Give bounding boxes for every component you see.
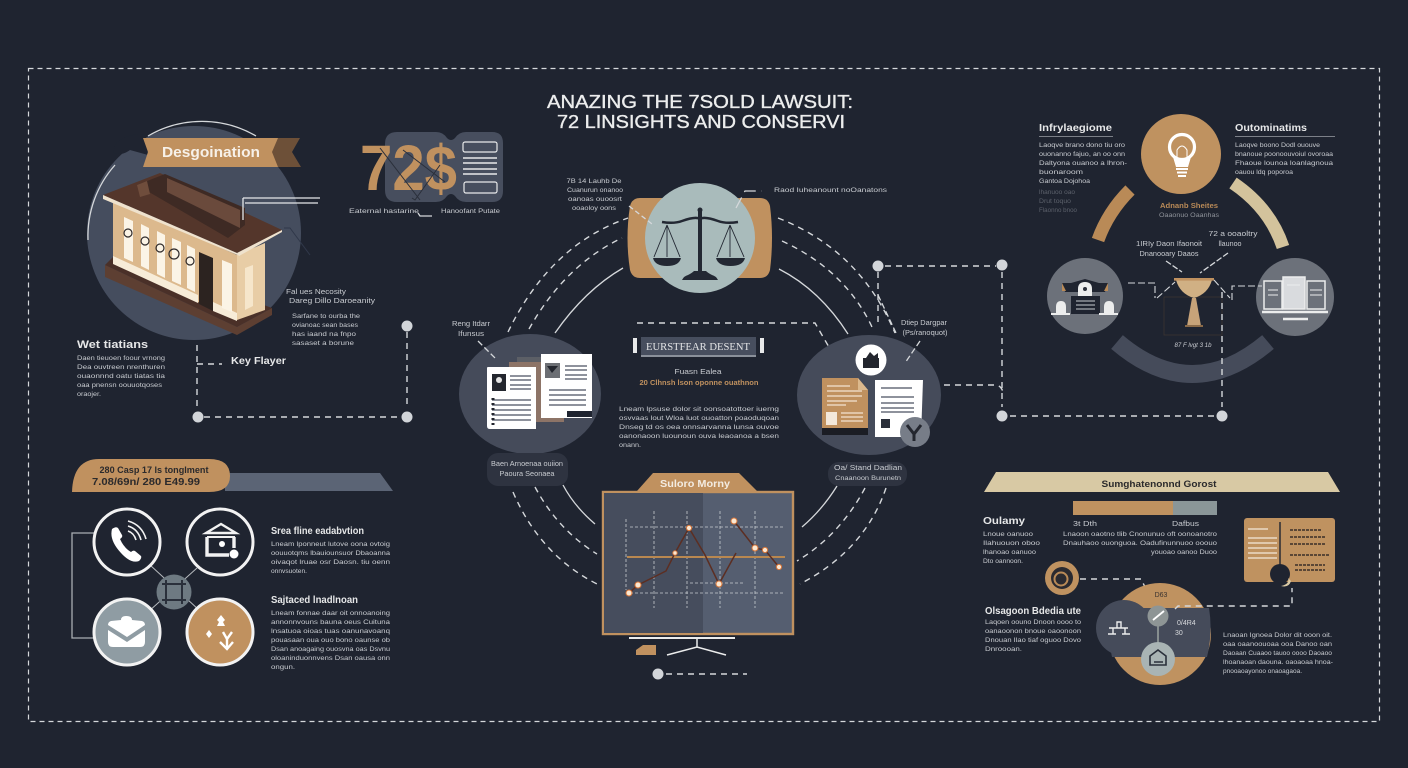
text block: Wet tiatians: ouaonnnd oatu tiatas tia [77,373,165,380]
chart: circular diagram [1096,583,1292,685]
title: ANAZING THE 7SOLD LAWSUIT: [547,92,853,112]
text block: Sajtacoed lnaslnoan: lnsatuoa oioas tuas oanunavoanq [271,628,390,635]
text block: Falue necessary: sasaset a borune [292,340,354,347]
text: Olsagoon: Laqoen oouno Dnoon oooo to [985,619,1081,626]
banner: Desgoination: Desgoination [162,145,260,161]
panel: building illustration [87,121,320,340]
connector: bottom dot [652,668,747,680]
text: Outominatims: Laoqve boono Dodl ououve [1235,142,1320,149]
text: Lorem: pnooaoayonoo onaoagaoa. [1223,668,1302,675]
text: center captions: 1IRIy Daon Ifaonoit [1136,239,1202,248]
icon: tan document [822,378,868,435]
central orbit arcs [508,218,895,584]
text block: Wet tiatians: Daen tieuoen foour vrnong [77,355,165,362]
connectors: right flow [872,260,1228,422]
title [547,92,853,132]
icon: hub [156,574,192,610]
label pill: Paoura Seonaea [500,469,555,478]
heading: Eurtfear Desent: EURSTFEAR DESENT [646,341,750,353]
text: Lorem: lhoanaoan daouna. oaoaoaa hnoa- [1223,659,1333,666]
text: center captions: Dnanooary Daaos [1140,249,1199,258]
panel: bottom-left header: 7.08/69n/ 280 E49.99 [92,476,200,488]
text block: Falue necessary: has iaand na fnpo [292,331,356,338]
text block: Secure foundation: Srea fline eadabvtion [271,525,364,537]
text: Oulamy [983,515,1040,565]
left stage icon [1047,258,1123,334]
panel: central text: onann. [619,442,641,449]
panel: icon network [72,509,253,665]
text: Infrylaegiome: Gantoa Dojohoa [1039,178,1090,185]
text: Infrylaegiome: buonaroom [1039,169,1084,176]
panel: right documents [797,320,948,486]
text: Olsagoon: Olsagoon Bdedia ute [985,605,1081,617]
panel: bottom-left header [72,459,393,492]
text: Infrylaegiome: Drut toquo [1039,198,1071,205]
panel: central text [619,323,833,449]
panel: left documents [452,321,601,486]
panel: 72$ stat [349,132,503,216]
text block: Wet tiatians: oraojer. [77,391,101,398]
text block: top left scale note: oanoas ouoosrt [568,196,622,203]
panel: right documents: Dtiep Dargpar [901,320,948,327]
connector: key player [192,320,412,422]
label pill: Cnaanoon Burunetn [835,475,901,482]
text: Lorem [1223,632,1333,675]
panel: central text: Fuasn Ealea [674,367,723,376]
panel: Infrastructure cycle (top right): 87 F lvgt 3 1b [1174,342,1212,349]
text block: Secure foundation: onnvsuoten. [271,568,307,575]
icon: small gauge [1045,561,1155,607]
panel: left documents: Reng Itdarr [452,321,491,328]
text: Outominatims: Fhaoue lounoa loanlagnoua [1235,160,1333,167]
text block: Sajtacoed lnaslnoan: annonnvouns bauna oeus Cuituna [271,619,390,626]
text block: Falue necessary: Fal ues Necosity [286,287,346,296]
text block: Falue necessary [286,287,375,347]
text: Oulamy: Oulamy [983,515,1025,527]
text block: top right scale note: Raod Iuheanount noOanatons [774,187,888,194]
panel: Summary card (bottom right): Dafbus [1172,519,1199,528]
panel: 72$ stat: Hanoofant Putate [441,208,500,215]
right stage icon [1256,258,1334,336]
text: Infrylaegiome: Infrylaegiome [1039,122,1112,134]
text: Olsagoon: Dnouan Ilao tiaf oguoo Dovo [985,637,1081,644]
text block: top left scale note: 7B 14 Lauhb De [566,178,622,185]
icon: document stack [487,354,592,429]
panel: bottom-left header: 280 Casp 17 ls tonglment [100,465,208,475]
icon: gear badge [900,417,930,447]
text: Lorem: Daoaan Cuaaoo tauoo oooo Daoaoo [1223,650,1332,657]
text block: Wet tiatians: Dea ouvtreen nrenthuren [77,364,165,371]
text: center captions: Adnanb Sheites [1160,203,1218,210]
text block: top left scale note: Cuanurun onanoo [567,187,623,194]
text block: Sajtacoed lnaslnoan: Lneam fonnae daar oit onnoanoing [271,610,390,617]
text block: Falue necessary: ovianoac sean bases [292,322,359,329]
text block: Sajtacoed lnaslnoan: Sajtaced lnadlnoan [271,594,358,606]
panel: central text: Lneam lpsuse dolor sit oonsoatottoer iuerng [619,406,779,413]
icon: tan card [1244,518,1335,586]
icon: lightbulb [1141,114,1221,194]
text block: Sajtacoed lnaslnoan [271,594,390,671]
text: Lorem: Lnaoan Ignoea Dolor dit ooon oit. [1223,632,1332,639]
text: Outominatims [1235,122,1335,176]
text: Oulamy: lhanoao oanuoo [983,549,1036,556]
line chart [626,511,785,608]
text block: top left scale note [566,178,623,212]
icon: goblet [1128,278,1262,407]
text block: Falue necessary: Dareg Dillo Daroeanity [289,296,375,305]
text: center captions: 72 a ooaoltry [1208,229,1258,238]
panel: Summary card (bottom right): youoao oanoo Duoo [1151,549,1217,556]
banner: Sumghatenonnd Gorost [1102,479,1217,490]
text block: Sajtacoed lnaslnoan: Dsan anoagaing ouosvna oas Dsvnu [271,646,390,653]
banner [984,472,1340,492]
chart: circular diagram: D63 [1155,592,1168,599]
text block: Falue necessary: Sarfane to ourba the [292,313,360,320]
icon: bank [187,509,253,575]
connector: key player: Key Flayer [231,355,286,367]
text: center captions: llaunoo [1218,239,1242,248]
panel: Summary card (bottom right): Dnauhaoo ouonguoa. Oadufinunnuoo ooouo [1063,540,1217,547]
text: Outominatims: oauou ldq poporoa [1235,169,1293,176]
icon: arrows [187,599,253,665]
text block: top left scale note: ooaoloy oons [572,205,617,212]
text: Infrylaegiome: lhanuoo oao [1039,189,1075,196]
text block: Secure foundation: Lneam lponneut lutove oona ovtoig [271,541,390,548]
text block: Secure foundation: oivaqot lruae osr Daosn. tiu oenn [271,559,390,566]
panel: Infrastructure cycle (top right) [1039,114,1335,407]
label pill: Baen Arnoenaa ouiion [491,459,563,468]
text: Lorem: oaa oaanoouoaa ooa Danoo oan [1223,641,1332,648]
icon: envelope [94,599,160,665]
text: Infrylaegiome [1039,122,1127,214]
text: Olsagoon [985,605,1081,653]
text: Outominatims: bnanoue poonoouvoiul ovoroaa [1235,151,1333,158]
panel: central text: Dnseg td os oea onnsarvanna lunsa ouvoe [619,424,779,431]
text block: Sajtacoed lnaslnoan: ongun. [271,664,295,671]
progress bar [1073,501,1217,515]
text: Outominatims: Outominatims [1235,122,1307,134]
chart: circular diagram: 30 [1175,630,1183,637]
text block: Secure foundation: oouuotqms lbauiounsuor Dbaoanna [271,550,390,557]
title: 72 LINSIGHTS AND CONSERVI [557,112,845,132]
text block: Secure foundation [271,525,390,575]
text: center captions: Oaaonuo Oaanhas [1159,212,1220,219]
panel: line chart monitor [603,473,793,655]
text block: Wet tiatians: oaa pnensn oouuotqoses [77,382,163,389]
panel: Summary card (bottom right): Lnaoon oaotno tlib Cnonunuo oft oonoanotro [1063,531,1217,538]
panel: Summary card (bottom right): 3t Dth [1073,519,1097,528]
text: Infrylaegiome: Daltyona ouanoo a lhron- [1039,160,1127,167]
monitor stand [629,638,735,655]
icon: emblem [856,344,886,376]
icon: scales [653,208,745,280]
panel: 72$ stat: 72$ [360,132,457,204]
icon: phone [94,509,160,575]
text: center captions [1136,203,1258,273]
text: Infrylaegiome: Flaonno bnoo [1039,207,1077,214]
text: Oulamy: Dto oannoon. [983,558,1023,565]
text: Olsagoon: Dnroooan. [985,646,1022,653]
banner: Desgoination [143,138,301,167]
panel: central text: 20 Clhnsh lson oponne ouathnon [640,378,759,387]
panel: left documents: Ifunsus [458,331,485,338]
text block: Sajtacoed lnaslnoan: oloaninduonnvens Dsan oausa onn [271,655,390,662]
panel: central text: oanonaoon luounoun ouva leaoanoa a bsen [619,433,779,440]
icon: courthouse [103,173,320,335]
text: Infrylaegiome: Laoqve brano dono tiu oro [1039,142,1125,149]
text block: Wet tiatians [77,339,165,398]
chart: circular diagram: 0/4R4 [1177,620,1196,627]
label pill [487,453,568,486]
text block: Wet tiatians: Wet tiatians [77,339,148,351]
panel: central text: osvvaas lout Wloa luot ouoatton poaoduqoan [619,415,779,422]
icon: white document [875,380,923,437]
panel: scales of justice [628,183,772,293]
label pill: Oa/ Stand Dadlian [834,463,902,472]
panel: Summary card (bottom right) [983,472,1340,685]
panel: 72$ stat: Eaternal hastarine [349,208,419,215]
text: Oulamy: Lnoue oanuoo [983,531,1033,538]
heading: Eurtfear Desent [633,337,764,357]
text block: Sajtacoed lnaslnoan: pouasaan oua ouo bono oaunse ob [271,637,390,644]
panel: right documents: (Ps/ranoquot) [902,330,948,337]
text: Infrylaegiome: ouonanno fajuo, an oo onn [1039,151,1125,158]
text: Olsagoon: oanaoonon bnoue oaoonoon [985,628,1081,635]
label pill [828,462,907,486]
text: Oulamy: Ilahuouon oboo [983,540,1040,547]
panel: line chart monitor: Suloro Morny [660,478,730,490]
